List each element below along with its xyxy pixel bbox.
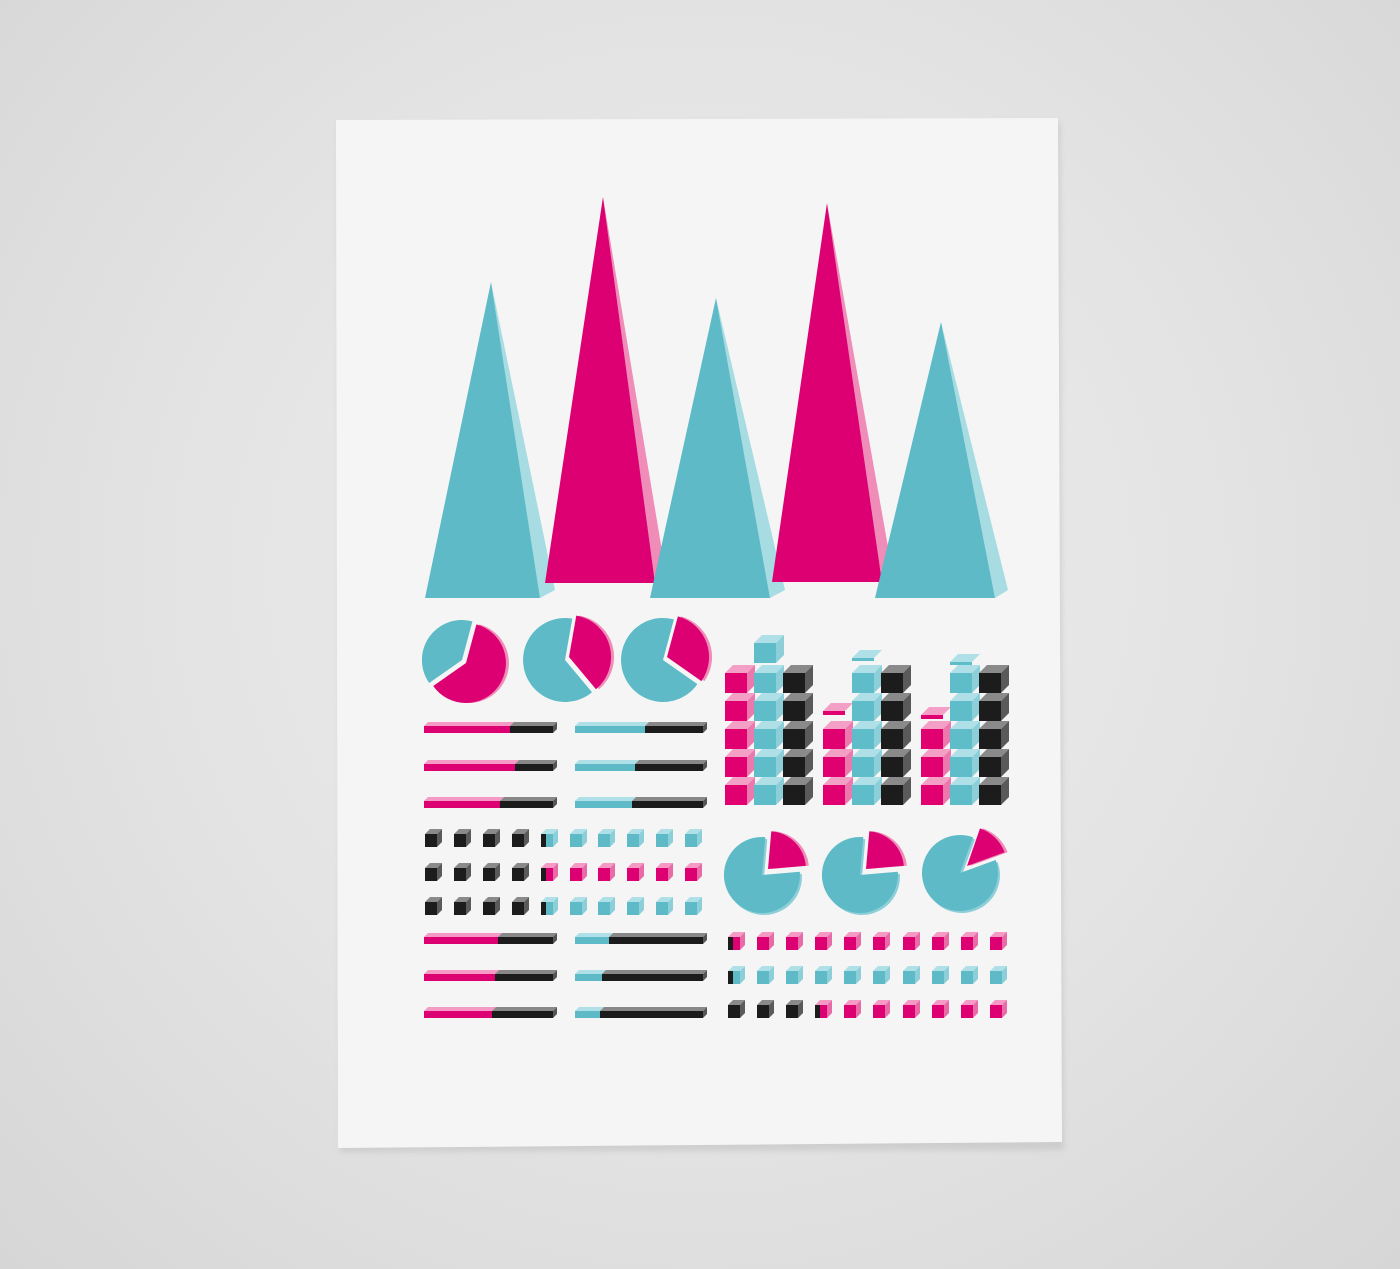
- pie charts lower row: [724, 828, 1008, 915]
- bar L3: [424, 797, 557, 808]
- stack group 2: [823, 650, 911, 805]
- horizontal bars upper: [424, 722, 707, 808]
- triangle 3 teal: [650, 298, 785, 598]
- small cube grid left: [425, 829, 702, 915]
- bar L6: [424, 1007, 557, 1018]
- bar R6: [575, 1007, 707, 1018]
- stack group 1: [725, 635, 813, 805]
- stack group 3: [921, 654, 1009, 805]
- pie 4: [724, 831, 809, 915]
- triangle 1 teal: [425, 282, 555, 598]
- pie 1: [422, 620, 509, 703]
- bar L1: [424, 722, 557, 733]
- triangle chart: [425, 197, 1008, 598]
- pie 5: [822, 831, 907, 915]
- triangle 4 magenta: [772, 203, 893, 582]
- 3D bar stacks: [725, 635, 1009, 805]
- bar L5: [424, 970, 557, 981]
- bar R4: [575, 933, 707, 944]
- bar R2: [575, 760, 707, 771]
- triangle 5 teal: [875, 322, 1008, 598]
- small cube grid right: [728, 932, 1007, 1018]
- triangle 2 magenta: [545, 197, 666, 583]
- bar R1: [575, 722, 707, 733]
- poster sheet: [336, 118, 1064, 1152]
- bar R3: [575, 797, 707, 808]
- bar L4: [424, 933, 557, 944]
- pie 3: [621, 616, 712, 702]
- bar R5: [575, 970, 707, 981]
- pie 2: [523, 616, 614, 702]
- horizontal bars lower: [424, 933, 707, 1018]
- bar L2: [424, 760, 557, 771]
- pie charts top row: [422, 616, 712, 703]
- pie 6: [922, 828, 1008, 913]
